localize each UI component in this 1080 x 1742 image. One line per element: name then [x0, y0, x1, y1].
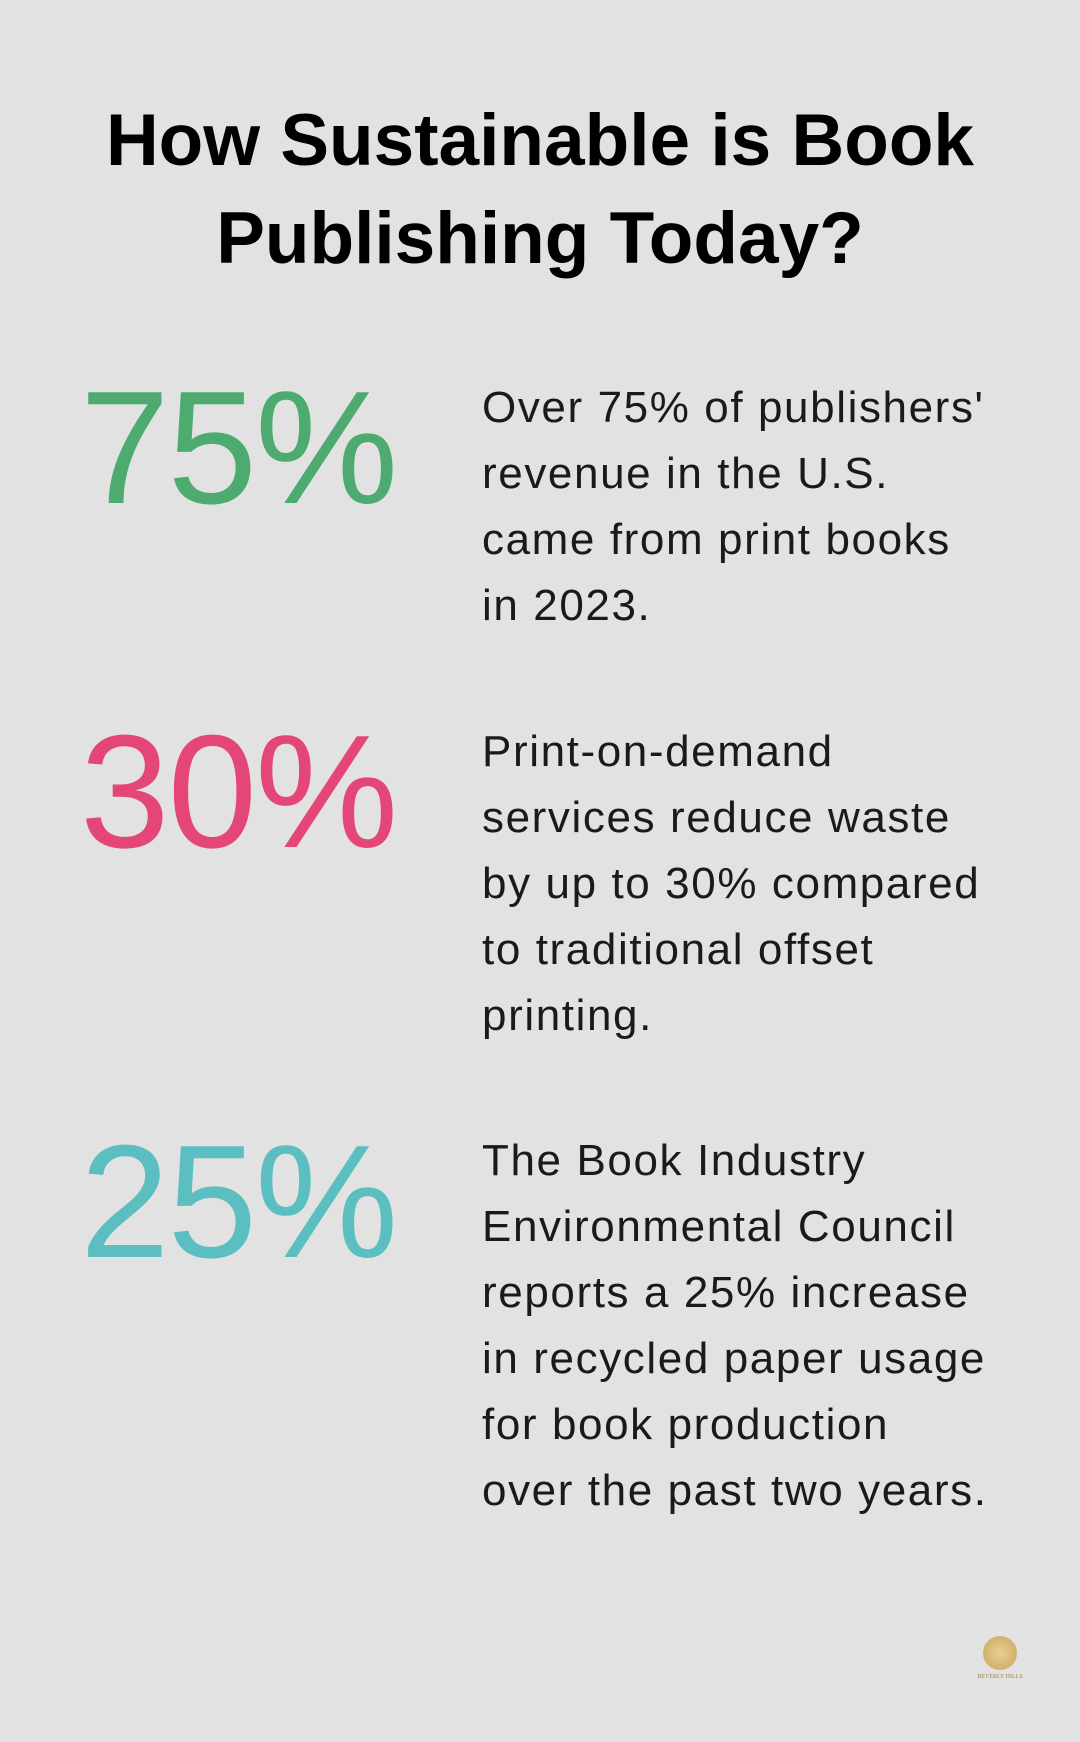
stat 2 text: printing. — [482, 991, 653, 1040]
stat 3 text — [482, 1136, 988, 1515]
stat 1 number: 75% — [80, 358, 396, 538]
title: How Sustainable is Book — [106, 100, 974, 181]
logo: BEVERLY HILLS — [977, 1674, 1023, 1680]
stat 3 text: over the past two years. — [482, 1466, 988, 1515]
stat 2 text: by up to 30% compared — [482, 859, 980, 908]
stat 1 text: in 2023. — [482, 581, 651, 630]
stat 3 text: reports a 25% increase — [482, 1268, 970, 1317]
stat 3 text: in recycled paper usage — [482, 1334, 986, 1383]
stat 2 number: 30% — [80, 702, 396, 882]
stat 3 number: 25% — [80, 1112, 396, 1292]
stat 3 text: for book production — [482, 1400, 889, 1449]
stat 3 text: The Book Industry — [482, 1136, 866, 1185]
stat 2 text: services reduce waste — [482, 793, 951, 842]
stat 1 text: came from print books — [482, 515, 951, 564]
logo — [977, 1636, 1023, 1680]
stat 2 text — [482, 727, 980, 1040]
stat 2 text: Print-on-demand — [482, 727, 834, 776]
stat 1 text — [482, 383, 985, 630]
stat 3 text: Environmental Council — [482, 1202, 956, 1251]
title — [106, 100, 974, 279]
stat 2 text: to traditional offset — [482, 925, 874, 974]
stat 1 text: Over 75% of publishers' — [482, 383, 985, 432]
title: Publishing Today? — [216, 198, 864, 279]
stat 1 text: revenue in the U.S. — [482, 449, 889, 498]
